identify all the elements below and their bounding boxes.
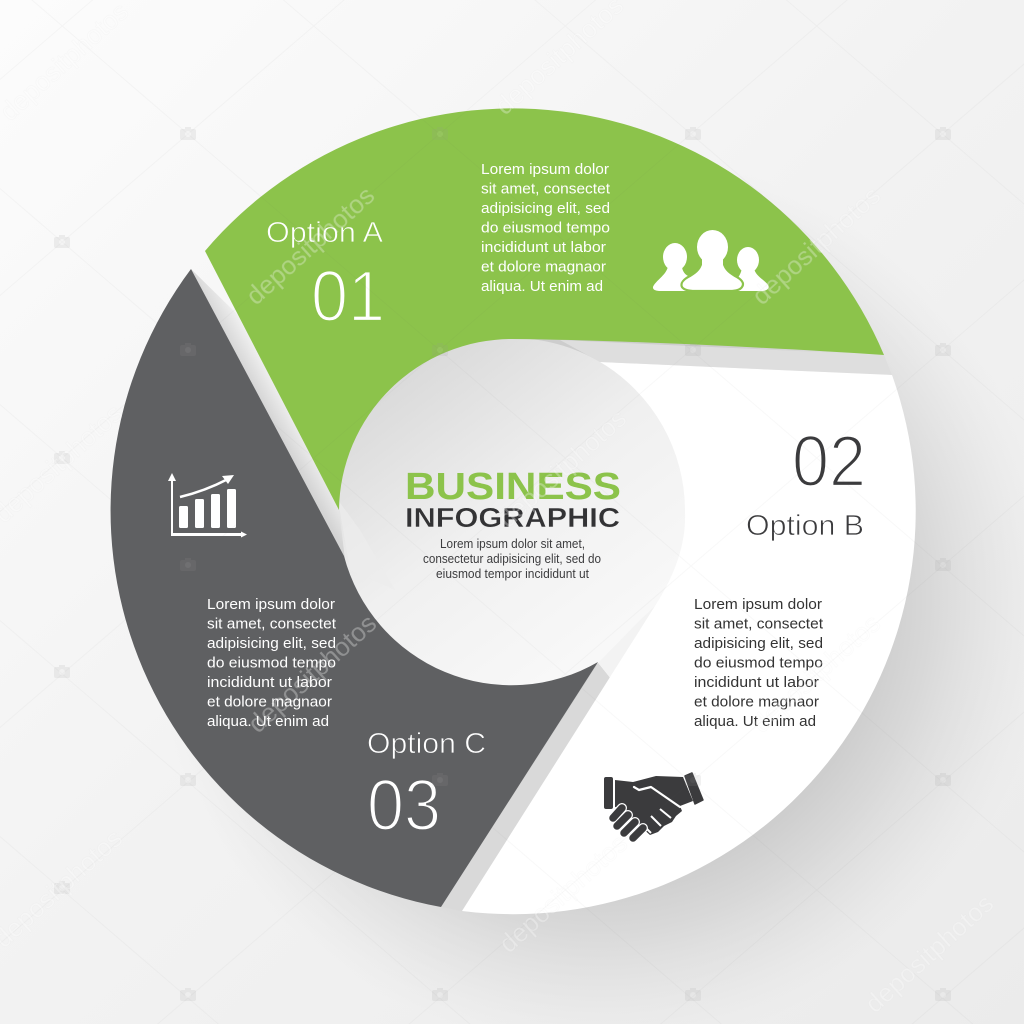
option C body text: do eiusmod tempo	[207, 654, 336, 672]
option B body text: aliqua. Ut enim ad	[694, 713, 816, 730]
option C body text: aliqua. Ut enim ad	[207, 713, 329, 730]
heading: infographic: INFOGRAPHIC	[405, 502, 620, 533]
option A body text	[481, 161, 611, 295]
icon: growth bar chart	[168, 473, 247, 538]
watermark overlay: depositphotos	[240, 180, 380, 311]
panel: segment 03 Option C	[111, 269, 598, 907]
heading: business: BUSINESS	[405, 466, 621, 508]
option C label: Option C	[367, 728, 486, 760]
number 03: 03	[367, 766, 441, 846]
watermark overlay: depositphotos	[493, 828, 633, 959]
option A body text: adipisicing elit, sed	[481, 200, 610, 217]
icon: handshake	[604, 773, 703, 838]
icon: people group	[653, 230, 769, 291]
option C body text: et dolore magnaor	[207, 694, 332, 710]
white segment shape	[462, 362, 916, 914]
option A body text: aliqua. Ut enim ad	[481, 278, 603, 295]
option B body text: do eiusmod tempo	[694, 654, 823, 672]
center title block	[405, 466, 621, 581]
option C body text: Lorem ipsum dolor	[207, 596, 335, 613]
option C body text: sit amet, consectet	[207, 616, 337, 632]
watermark overlay: depositphotos	[492, 403, 632, 534]
option B body text: incididunt ut labor	[694, 674, 819, 691]
option B body text	[694, 596, 824, 730]
center description: consectetur adipisicing elit, sed do	[423, 552, 601, 566]
inner circle	[338, 338, 686, 686]
option B body text: Lorem ipsum dolor	[694, 596, 822, 613]
option A body text: et dolore magnaor	[481, 258, 606, 276]
option A body text: incididunt ut labor	[481, 239, 606, 256]
soft long shadow of the circle	[120, 120, 1024, 1024]
option A label: Option A	[266, 217, 384, 249]
watermark overlay: depositphotos	[242, 608, 382, 739]
grey segment shape	[111, 269, 598, 907]
fold shadows between segments	[191, 269, 892, 911]
option C body text: incididunt ut labor	[207, 674, 332, 691]
option A body text: sit amet, consectet	[481, 180, 611, 198]
option C body text: adipisicing elit, sed	[207, 635, 336, 652]
number 02: 02	[792, 422, 866, 502]
option B label: Option B	[746, 510, 864, 542]
panel: segment 01 Option A	[205, 108, 884, 510]
watermark overlay: depositphotos	[859, 888, 999, 1019]
center description: Lorem ipsum dolor sit amet,	[440, 537, 585, 551]
green segment shape	[205, 108, 884, 510]
option B body text: adipisicing elit, sed	[694, 635, 823, 652]
watermark overlay: depositphotos	[746, 608, 886, 739]
center description	[423, 537, 601, 581]
watermark overlay: depositphotos	[746, 180, 886, 311]
center description: eiusmod tempor incididunt ut	[436, 567, 590, 581]
option A body text: do eiusmod tempo	[481, 220, 610, 236]
option B body text: et dolore magnaor	[694, 694, 819, 710]
option A body text: Lorem ipsum dolor	[481, 161, 609, 178]
option B body text: sit amet, consectet	[694, 616, 824, 632]
panel: segment 02 Option B	[462, 362, 916, 914]
option C body text	[207, 596, 337, 730]
number 01: 01	[311, 257, 385, 337]
